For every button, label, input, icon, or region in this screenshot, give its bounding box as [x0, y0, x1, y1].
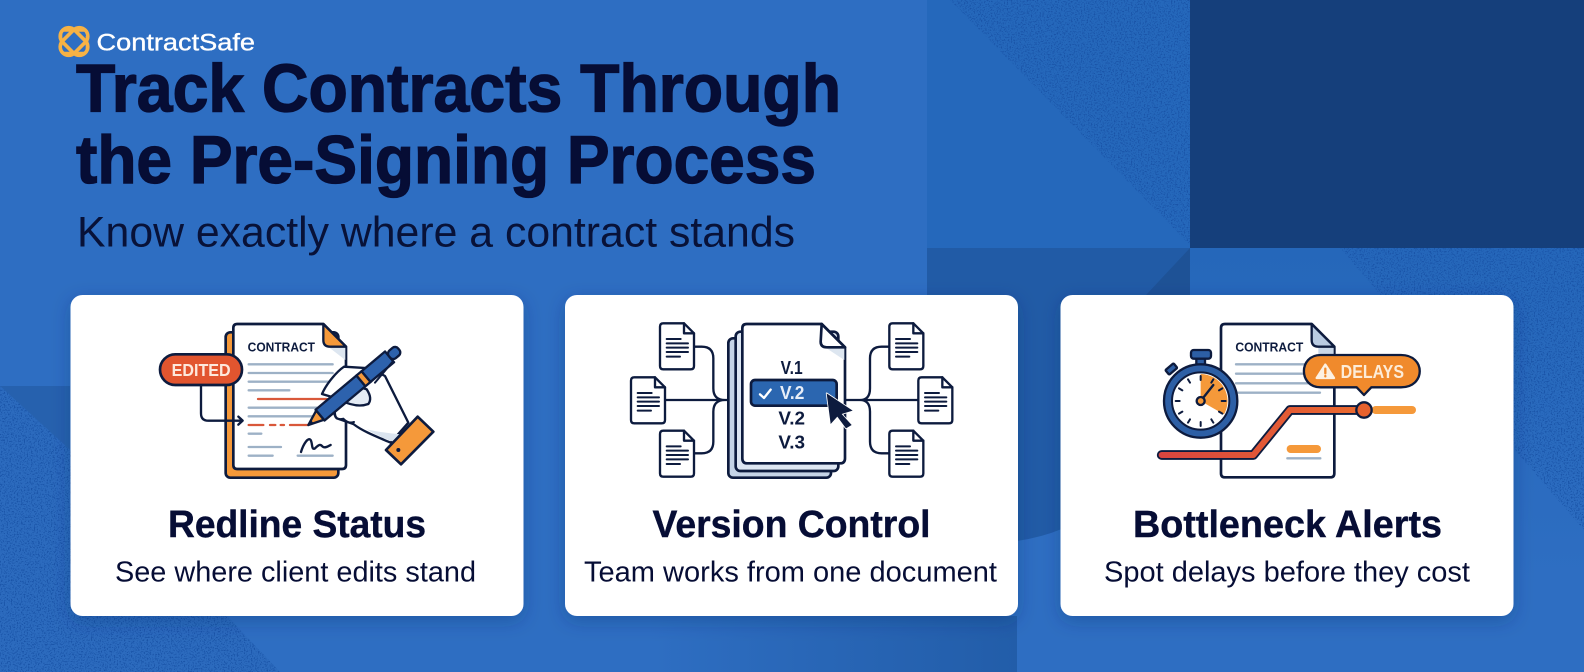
- pen: [304, 344, 403, 430]
- logo: ContractSafe: [57, 24, 255, 59]
- logo wordmark: ContractSafe: [96, 30, 255, 56]
- delay bubble: [1304, 355, 1420, 395]
- icon: version stack with linked documents: V.2: [780, 382, 804, 403]
- cursor: [827, 393, 853, 428]
- icon: version stack with linked documents: V.2: [778, 407, 805, 428]
- title: [76, 50, 841, 198]
- heading: Version Control: Version Control: [652, 504, 930, 546]
- icon: logo knot: [57, 24, 91, 59]
- title: Track Contracts Through: [76, 50, 841, 126]
- heading: Bottleneck Alerts: Bottleneck Alerts: [1133, 504, 1442, 546]
- stopwatch: [1164, 350, 1237, 438]
- icon: contract being edited by hand with pen: CONTRACT: [248, 340, 315, 355]
- trend line: [1372, 406, 1416, 414]
- icon: contract being edited by hand with pen: [160, 324, 433, 478]
- panel: Bottleneck Alerts: [1060, 295, 1514, 616]
- icon: contract being edited by hand with pen: EDITED: [172, 360, 231, 380]
- icon: stopwatch, contract and delay alert: CONTRACT: [1235, 340, 1303, 355]
- cuff: [386, 417, 433, 464]
- icon: stopwatch, contract and delay alert: [1162, 324, 1420, 477]
- subtitle: Know exactly where a contract stands: [77, 208, 795, 256]
- panel: dark navy square: [1190, 0, 1584, 248]
- lower fingers: [335, 413, 354, 423]
- caption: Version Control: Team works from one document: [584, 556, 997, 588]
- caption: Redline Status: See where client edits stand: [115, 556, 476, 588]
- caption: Bottleneck Alerts: Spot delays before they cost: [1104, 556, 1470, 588]
- panel: Version Control: [565, 295, 1018, 616]
- panel: Redline Status: [70, 295, 524, 616]
- finger: [337, 388, 370, 405]
- icon: version stack with linked documents: V.1: [781, 357, 803, 378]
- icon: version stack with linked documents: V.3: [778, 431, 805, 452]
- hand: [322, 367, 408, 443]
- icon: version stack with linked documents: [631, 323, 952, 478]
- icon: stopwatch, contract and delay alert: DELAYS: [1341, 361, 1404, 382]
- small documents: [660, 323, 694, 369]
- heading: Redline Status: Redline Status: [168, 504, 426, 546]
- title: the Pre-Signing Process: [76, 122, 816, 198]
